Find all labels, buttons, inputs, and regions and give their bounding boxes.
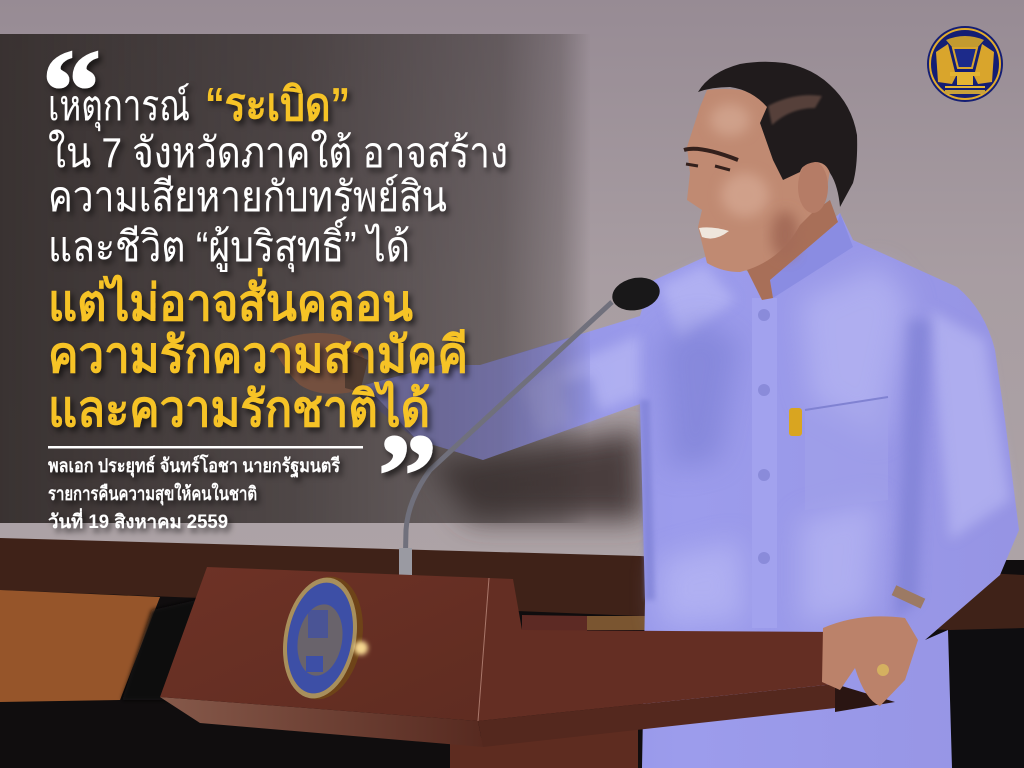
logo: government emblem	[927, 26, 1003, 102]
head: hair	[698, 62, 857, 207]
head: eyes and brows	[684, 149, 738, 170]
attribution text	[48, 454, 341, 533]
raised hand and sleeve seen through the panel	[272, 332, 590, 460]
shirt: placket and buttons	[752, 298, 777, 628]
line 3: ความเสียหายกับทรัพย์สิน	[48, 173, 447, 220]
podium emblem	[274, 570, 372, 706]
speaker name: พลเอก ประยุทธ์ จันทร์โอชา นายกรัฐมนตรี	[48, 454, 341, 479]
line 1: เหตุการณ์	[48, 82, 190, 132]
quote panel	[0, 34, 590, 523]
closing quote mark: ”	[378, 410, 437, 541]
line 5: แต่ไม่อาจสั่นคลอน	[48, 268, 413, 331]
shirt: sleeve and fold highlights	[520, 265, 1010, 625]
shirt: breast pocket with gold pin	[789, 397, 888, 510]
shirt: collar	[770, 213, 853, 298]
head: ear	[798, 161, 828, 213]
microphone	[399, 273, 663, 575]
head: face	[687, 89, 830, 272]
neck	[743, 200, 838, 300]
head: face highlights	[710, 104, 799, 259]
opening quote mark: “	[42, 25, 101, 156]
head: mouth	[699, 227, 729, 239]
line 7: และความรักชาติได้	[48, 380, 430, 437]
person: speaker in lavender shirt	[350, 62, 1019, 768]
head: hair streak	[768, 95, 822, 125]
date: วันที่ 19 สิงหาคม 2559	[48, 508, 228, 533]
line 1 highlight: “ระเบิด”	[205, 78, 350, 130]
hand: right hand on podium	[822, 585, 925, 706]
line 2: ใน 7 จังหวัดภาคใต้ อาจสร้าง	[48, 129, 508, 176]
shirt: torso and sleeves	[350, 213, 1019, 768]
line 4: และชีวิต “ผู้บริสุทธิ์” ได้	[48, 216, 410, 273]
divider rule	[48, 446, 363, 448]
podium	[160, 567, 895, 768]
line 6: ความรักความสามัคคี	[48, 327, 468, 383]
quote text: white and gold lines	[48, 78, 508, 437]
programme name: รายการคืนความสุขให้คนในชาติ	[48, 482, 257, 506]
